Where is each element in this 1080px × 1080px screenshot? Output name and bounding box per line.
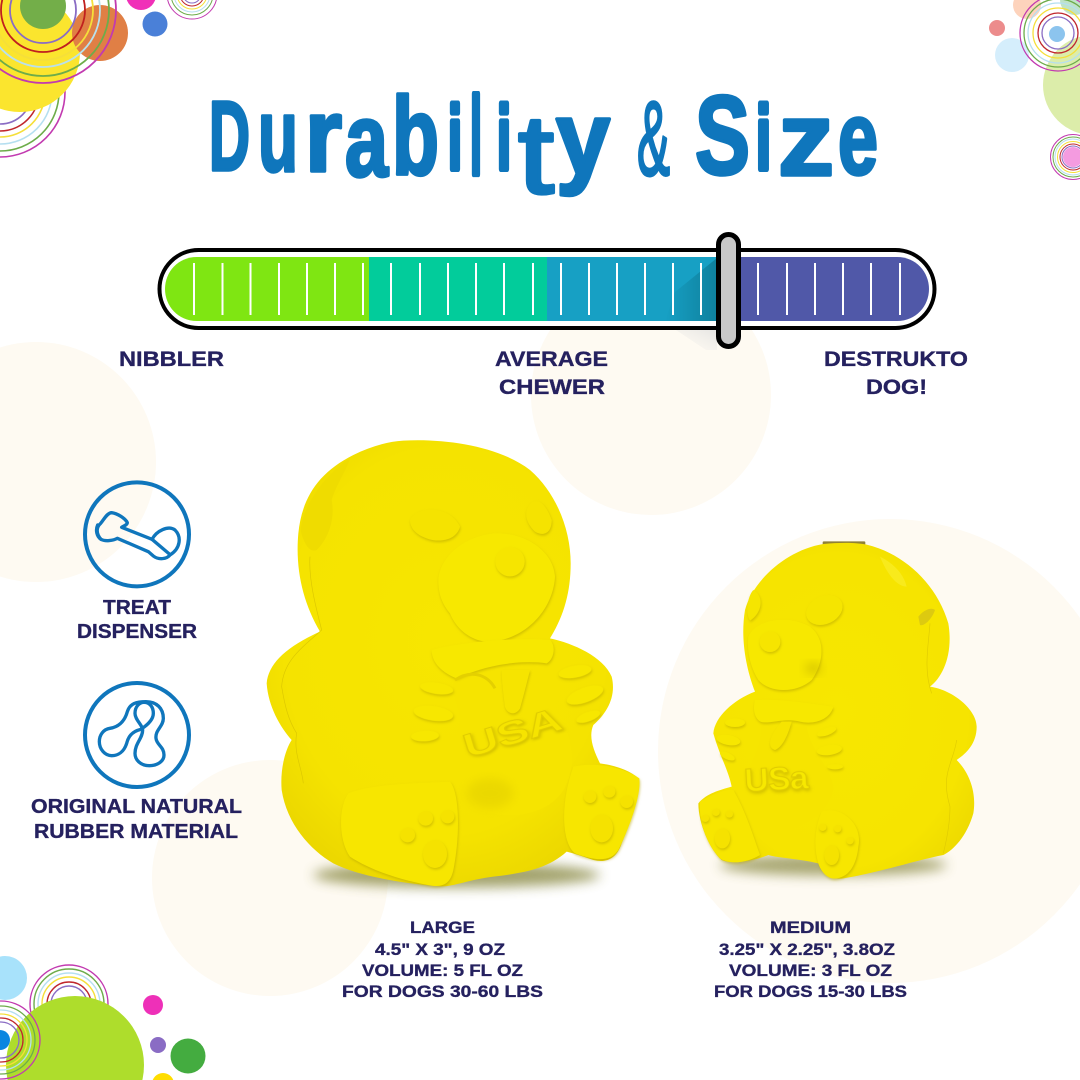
title: t bbox=[518, 92, 554, 217]
medium bear toy bbox=[698, 541, 977, 879]
right foot pads bbox=[584, 786, 633, 842]
left foot bbox=[700, 790, 760, 862]
seam bbox=[927, 623, 957, 853]
title: i bbox=[448, 89, 462, 189]
size info: medium: 3.25" X 2.25", 3.8OZ bbox=[719, 940, 895, 959]
size info: medium: VOLUME: 3 FL OZ bbox=[729, 961, 892, 980]
title: i bbox=[497, 89, 511, 189]
right foot pads bbox=[819, 824, 854, 865]
label: average chewer bbox=[495, 348, 608, 399]
slider handle bbox=[718, 234, 738, 346]
treat hole bbox=[823, 541, 865, 546]
nose bbox=[495, 547, 525, 576]
label: average chewer: AVERAGE bbox=[495, 348, 608, 371]
title: z bbox=[778, 82, 834, 198]
label: average chewer: CHEWER bbox=[499, 376, 605, 399]
label: destrukto dog: DOG! bbox=[866, 376, 927, 399]
title: S bbox=[695, 73, 750, 198]
label: destrukto dog: DESTRUKTO bbox=[824, 348, 968, 371]
title: i bbox=[756, 89, 771, 189]
size info: large bbox=[342, 918, 543, 1001]
belly smudge bbox=[467, 778, 513, 808]
label: treat dispenser bbox=[77, 597, 198, 643]
size info: medium: MEDIUM bbox=[770, 918, 851, 937]
large bear toy bbox=[267, 440, 640, 888]
title: u bbox=[258, 78, 298, 194]
pot lettering: USa bbox=[743, 759, 810, 798]
bear body bbox=[267, 440, 639, 886]
title: D bbox=[209, 81, 250, 191]
label: destrukto dog bbox=[824, 348, 968, 399]
background cream circles bbox=[0, 275, 1080, 996]
paw fingers bbox=[716, 718, 843, 769]
label: treat dispenser: DISPENSER bbox=[77, 621, 198, 643]
title: r bbox=[305, 78, 342, 194]
eyes bbox=[747, 589, 847, 631]
ear bbox=[301, 458, 350, 551]
pot lettering: USA bbox=[459, 700, 566, 765]
title: & bbox=[637, 80, 670, 198]
size info: large: LARGE bbox=[410, 918, 475, 937]
size info: large: 4.5" X 3", 9 OZ bbox=[375, 940, 505, 959]
pot bbox=[432, 639, 572, 815]
bar outline bbox=[160, 250, 934, 328]
right foot bbox=[564, 765, 640, 859]
label: original natural rubber material bbox=[31, 796, 242, 843]
nose bbox=[760, 631, 780, 652]
title: l bbox=[470, 75, 482, 198]
bear body bbox=[698, 543, 977, 879]
size info: large: VOLUME: 5 FL OZ bbox=[362, 961, 523, 980]
slider shadow bbox=[665, 258, 717, 321]
durability bar bbox=[160, 234, 934, 350]
icon: treat dispenser bone bbox=[85, 482, 189, 586]
ground shadow bbox=[313, 862, 600, 888]
size info: large: FOR DOGS 30-60 LBS bbox=[342, 982, 543, 1001]
tick marks bbox=[194, 263, 900, 315]
icon: natural rubber bbox=[85, 683, 189, 787]
title: a bbox=[345, 83, 389, 199]
left foot pads bbox=[400, 810, 454, 868]
decoration: top-right circles and rings bbox=[989, 0, 1080, 180]
ground shadow bbox=[720, 854, 947, 876]
paw fingers bbox=[411, 663, 606, 742]
label: original natural rubber material: RUBBER MATERIAL bbox=[34, 821, 238, 843]
label: original natural rubber material: ORIGINAL NATURAL bbox=[31, 796, 242, 818]
left foot bbox=[341, 782, 458, 886]
right foot bbox=[815, 810, 859, 879]
eyes bbox=[410, 501, 552, 541]
label: treat dispenser: TREAT bbox=[103, 597, 171, 619]
seam bbox=[282, 557, 322, 783]
decoration: bottom-left circles and rings bbox=[0, 956, 206, 1080]
shade under muzzle bbox=[805, 662, 822, 674]
pot bbox=[743, 700, 833, 830]
title: e bbox=[838, 81, 878, 197]
size info: medium bbox=[714, 918, 907, 1001]
bar segments bbox=[165, 257, 929, 321]
muzzle bbox=[438, 533, 555, 642]
left foot pads bbox=[702, 809, 733, 848]
title: b bbox=[392, 75, 439, 198]
ear bbox=[880, 557, 907, 587]
size info: medium: FOR DOGS 15-30 LBS bbox=[714, 982, 907, 1001]
label: nibbler: NIBBLER bbox=[119, 348, 224, 371]
decoration: top-left circles and rings bbox=[0, 0, 217, 157]
title: y bbox=[556, 81, 610, 197]
muzzle bbox=[748, 620, 821, 690]
